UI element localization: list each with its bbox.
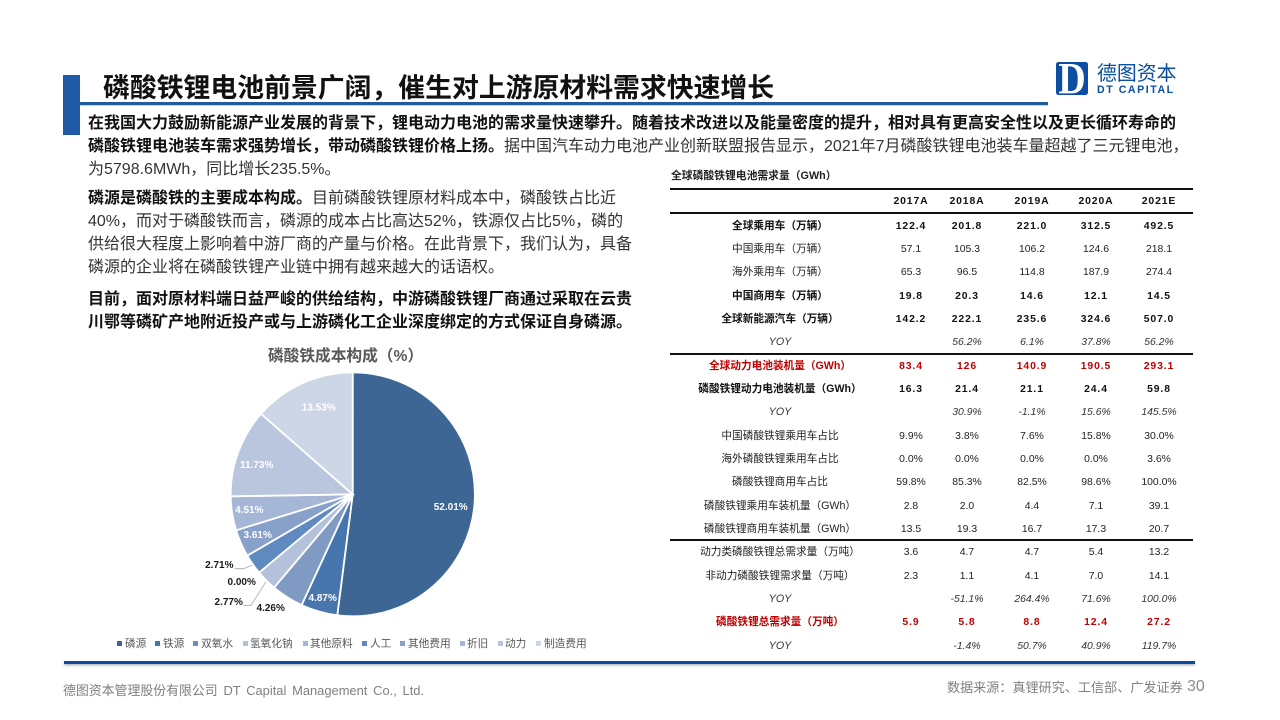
- row: global passenger cars: [732, 220, 1174, 232]
- text block: supply structure: 川鄂等磷矿产地附近投产或与上游磷化工企业深度绑定的方式保证自身磷源。: [88, 314, 632, 331]
- row: power LFP demand: 动力类磷酸铁锂总需求量（万吨）: [700, 546, 860, 558]
- row: global passenger cars: 221.0: [1017, 221, 1047, 232]
- row: global passenger cars: 312.5: [1081, 221, 1111, 232]
- row: total LFP demand: 27.2: [1147, 617, 1171, 628]
- row: global power battery installs: [709, 360, 1174, 372]
- table header: 2020A: [1078, 196, 1114, 207]
- row: China LFP passenger share: 30.0%: [1144, 431, 1174, 442]
- legend swatch 3: [193, 641, 198, 646]
- legend swatch 4: [242, 641, 248, 646]
- row: LFP install growth: -1.1%: [1018, 407, 1046, 418]
- row: global passenger cars: 201.8: [952, 221, 982, 232]
- pie chart: 11.73%: [240, 460, 273, 471]
- row: global passenger cars: 全球乘用车（万辆）: [732, 220, 828, 232]
- row: NEV growth: YOY: [769, 336, 791, 348]
- row: total demand growth: YOY: [769, 640, 791, 652]
- text block: supply structure: [88, 290, 632, 331]
- row: LFP power battery installs: 21.4: [955, 384, 979, 395]
- row: LFP commercial installs: 磷酸铁锂商用车装机量（GWh）: [704, 523, 856, 535]
- legend label 5: 其他原料: [310, 638, 353, 650]
- row: overseas passenger cars: 65.3: [901, 267, 921, 278]
- legend swatch 6: [362, 641, 367, 646]
- table header: [893, 196, 1176, 207]
- title underline: [79, 102, 1048, 105]
- row: non-power LFP demand: 14.1: [1149, 571, 1169, 582]
- row: LFP commercial share: 100.0%: [1141, 477, 1177, 488]
- row: LFP passenger installs: [704, 500, 1169, 512]
- row: China LFP passenger share: [721, 430, 1174, 442]
- legend swatch 8: [460, 641, 464, 646]
- row: global NEVs: 142.2: [896, 314, 926, 325]
- row: LFP power battery installs: 24.4: [1084, 384, 1108, 395]
- page number: 30: [1187, 678, 1205, 695]
- row: power LFP demand: 3.6: [904, 547, 918, 558]
- chart title: 磷酸铁成本构成（%）: [268, 348, 423, 364]
- row: global power battery installs: 83.4: [899, 361, 923, 372]
- row: non-power LFP demand: 非动力磷酸铁锂需求量（万吨）: [705, 570, 855, 582]
- row: power LFP demand: 13.2: [1149, 547, 1169, 558]
- row: LFP commercial share: 59.8%: [896, 477, 926, 488]
- row: overseas passenger cars: [732, 266, 1172, 278]
- legend swatch 2: [155, 641, 160, 646]
- row: China commercial vehicles: 12.1: [1084, 291, 1108, 302]
- row: NEV growth: [769, 336, 1174, 348]
- row: China LFP passenger share: 7.6%: [1020, 431, 1044, 442]
- row: LFP commercial share: 82.5%: [1017, 477, 1047, 488]
- row: global power battery installs: 140.9: [1017, 361, 1047, 372]
- table header: 2018A: [949, 196, 985, 207]
- row: overseas LFP passenger share: 0.0%: [1084, 454, 1108, 465]
- row: overseas LFP passenger share: 0.0%: [899, 454, 923, 465]
- table header: 2021E: [1142, 196, 1176, 207]
- table title: 全球磷酸铁锂电池需求量（GWh）: [671, 170, 837, 182]
- footer rule: [64, 661, 1195, 664]
- row: China passenger cars: 57.1: [901, 244, 921, 255]
- row: LFP commercial share: 85.3%: [952, 477, 982, 488]
- row: global power battery installs: 190.5: [1081, 361, 1111, 372]
- table header: 2019A: [1014, 196, 1050, 207]
- text block: phosphorus cost: [88, 189, 632, 276]
- pie chart: 0.00%: [228, 577, 256, 588]
- pie chart: 2.77%: [215, 597, 243, 608]
- row: total LFP demand: [716, 616, 1171, 628]
- table: demand forecast: [670, 188, 1193, 652]
- row: China passenger cars: 124.6: [1083, 244, 1109, 255]
- row: overseas passenger cars: 187.9: [1083, 267, 1109, 278]
- pie chart: 4.51%: [235, 505, 264, 516]
- row: China LFP passenger share: 9.9%: [899, 431, 923, 442]
- row: China commercial vehicles: 中国商用车（万辆）: [732, 290, 828, 302]
- text block: intro: 在我国大力鼓励新能源产业发展的背景下，锂电动力电池的需求量快速攀升。随着技术改进以及能量密度的提升，相对具有更高安全性以及更长循环寿命的: [88, 114, 1176, 132]
- pie chart: 52.01%: [434, 502, 468, 513]
- text block: intro: 为5798.6MWh，同比增长235.5%。: [88, 161, 341, 178]
- row: total demand growth: 119.7%: [1142, 641, 1176, 652]
- text block: intro: [88, 114, 1189, 178]
- row: LFP passenger installs: 磷酸铁锂乘用车装机量（GWh）: [704, 500, 856, 512]
- row: LFP power battery installs: 16.3: [899, 384, 923, 395]
- row: global NEVs: [721, 312, 1174, 325]
- row: NEV growth: 56.2%: [1144, 337, 1174, 348]
- row: non-power growth: 264.4%: [1014, 594, 1050, 605]
- row: non-power growth: 100.0%: [1141, 594, 1177, 605]
- table rows: [698, 196, 1177, 652]
- legend label 2: 铁源: [163, 638, 184, 650]
- pie chart: 3.61%: [244, 530, 272, 541]
- pie chart: [205, 373, 474, 616]
- legend swatch 9: [498, 641, 502, 646]
- row: China passenger cars: 218.1: [1146, 244, 1172, 255]
- row: LFP commercial installs: 19.3: [957, 524, 977, 535]
- row: total LFP demand: 5.8: [958, 617, 976, 628]
- row: overseas passenger cars: 海外乘用车（万辆）: [732, 266, 828, 278]
- row: overseas LFP passenger share: 海外磷酸铁锂乘用车占比: [721, 453, 839, 465]
- row: China passenger cars: 中国乘用车（万辆）: [732, 243, 828, 255]
- text block: phosphorus cost: 供给很大程度上影响着中游厂商的产量与价格。在此背景下，我们认为，具备: [88, 236, 632, 253]
- row: China passenger cars: 105.3: [954, 244, 980, 255]
- row: non-power LFP demand: [705, 570, 1169, 582]
- row: total LFP demand: 5.9: [902, 617, 920, 628]
- row: LFP passenger installs: 4.4: [1025, 501, 1039, 512]
- row: global passenger cars: 492.5: [1144, 221, 1174, 232]
- legend swatch 5: [302, 641, 308, 646]
- row: non-power LFP demand: 2.3: [904, 571, 918, 582]
- logo english name: DT CAPITAL: [1097, 84, 1175, 96]
- row: power LFP demand: 4.7: [1025, 547, 1039, 558]
- row: LFP commercial installs: 13.5: [901, 524, 921, 535]
- text block: phosphorus cost: 磷源的企业将在磷酸铁锂产业链中拥有越来越大的话语权。: [88, 259, 504, 276]
- row: global NEVs: 507.0: [1144, 314, 1174, 325]
- legend label 9: 动力: [505, 638, 526, 650]
- row: total LFP demand: 磷酸铁锂总需求量（万吨）: [716, 616, 844, 628]
- row: LFP power battery installs: 21.1: [1020, 384, 1044, 395]
- legend swatch 1: [117, 641, 122, 646]
- row: total demand growth: -1.4%: [953, 641, 981, 652]
- row: LFP commercial installs: [704, 522, 1169, 535]
- legend label 8: 折旧: [467, 638, 488, 650]
- row: overseas LFP passenger share: 0.0%: [955, 454, 979, 465]
- legend label 7: 其他费用: [408, 638, 451, 650]
- row: non-power LFP demand: 4.1: [1025, 571, 1039, 582]
- row: total demand growth: [769, 640, 1176, 652]
- row: LFP passenger installs: 2.0: [960, 501, 974, 512]
- row: power LFP demand: 5.4: [1089, 547, 1103, 558]
- row: LFP install growth: [769, 406, 1177, 418]
- row: global power battery installs: 126: [957, 361, 977, 372]
- row: global NEVs: 222.1: [952, 314, 982, 325]
- row: power LFP demand: 4.7: [960, 547, 974, 558]
- legend label 6: 人工: [370, 638, 391, 650]
- row: NEV growth: 56.2%: [952, 337, 982, 348]
- row: global power battery installs: 293.1: [1144, 361, 1174, 372]
- text block: phosphorus cost: 40%，而对于磷酸铁而言，磷源的成本占比高达52%，铁源仅占比5%，磷的: [88, 213, 623, 230]
- row: overseas LFP passenger share: 0.0%: [1020, 454, 1044, 465]
- row: NEV growth: 37.8%: [1081, 337, 1111, 348]
- table header: 2017A: [893, 196, 929, 207]
- row: non-power growth: YOY: [769, 593, 791, 605]
- data source: 数据来源：真锂研究、工信部、广发证券: [947, 680, 1183, 695]
- row: China LFP passenger share: 15.8%: [1081, 431, 1111, 442]
- pie chart: 13.53%: [302, 402, 336, 414]
- row: China LFP passenger share: 3.8%: [955, 431, 979, 442]
- row: non-power growth: 71.6%: [1081, 594, 1111, 605]
- legend label 3: 双氧水: [201, 638, 233, 650]
- row: LFP passenger installs: 7.1: [1089, 501, 1103, 512]
- row: total LFP demand: 8.8: [1023, 617, 1041, 628]
- row: total demand growth: 50.7%: [1017, 641, 1047, 652]
- row: overseas LFP passenger share: 3.6%: [1147, 454, 1171, 465]
- row: overseas LFP passenger share: [721, 452, 1171, 465]
- row: China commercial vehicles: 20.3: [955, 291, 979, 302]
- row: LFP power battery installs: 59.8: [1147, 384, 1171, 395]
- row: LFP install growth: 30.9%: [952, 407, 982, 418]
- row: overseas passenger cars: 274.4: [1146, 267, 1172, 278]
- row: LFP commercial installs: 16.7: [1022, 524, 1042, 535]
- pie chart: 4.87%: [309, 593, 337, 604]
- row: China passenger cars: [732, 242, 1172, 255]
- row: total demand growth: 40.9%: [1081, 641, 1111, 652]
- row: China commercial vehicles: 19.8: [899, 291, 923, 302]
- row: China commercial vehicles: 14.5: [1147, 291, 1171, 302]
- legend label 1: 磷源: [125, 638, 146, 650]
- legend swatch 10: [536, 641, 541, 646]
- row: LFP install growth: 145.5%: [1141, 407, 1177, 418]
- logo: DT Capital: [1056, 62, 1177, 96]
- row: LFP passenger installs: 2.8: [904, 501, 918, 512]
- logo chinese name: 德图资本: [1097, 62, 1177, 84]
- row: non-power LFP demand: 1.1: [960, 571, 974, 582]
- row: NEV growth: 6.1%: [1020, 337, 1044, 348]
- row: LFP commercial share: 磷酸铁锂商用车占比: [732, 476, 828, 488]
- row: LFP commercial share: 98.6%: [1081, 477, 1111, 488]
- row: LFP power battery installs: [698, 382, 1171, 395]
- pie chart: 4.26%: [257, 603, 285, 614]
- row: China passenger cars: 106.2: [1019, 244, 1045, 255]
- row: overseas passenger cars: 96.5: [957, 267, 977, 278]
- text block: phosphorus cost: 磷源是磷酸铁的主要成本构成。目前磷酸铁锂原材料成本中，磷酸铁占比近: [88, 190, 616, 206]
- row: total LFP demand: 12.4: [1084, 617, 1108, 628]
- row: China commercial vehicles: [732, 290, 1171, 302]
- row: global NEVs: 235.6: [1017, 314, 1047, 325]
- row: LFP commercial installs: 20.7: [1149, 524, 1169, 535]
- text block: intro: 磷酸铁锂电池装车需求强势增长，带动磷酸铁锂价格上扬。据中国汽车动力电池产业创新联盟报告显示，2021年7月磷酸铁锂电池装车量超越了三元锂电池，: [88, 138, 1189, 155]
- row: non-power growth: -51.1%: [951, 594, 983, 605]
- row: global power battery installs: 全球动力电池装机量（GWh）: [709, 360, 851, 372]
- row: global passenger cars: 122.4: [896, 221, 926, 232]
- title: 磷酸铁锂电池前景广阔，催生对上游原材料需求快速增长: [103, 73, 774, 103]
- footer company name: 德图资本管理股份有限公司 DT Capital Management Co., Ltd.: [63, 683, 424, 698]
- row: LFP power battery installs: 磷酸铁锂动力电池装机量（GWh）: [698, 383, 862, 395]
- row: LFP install growth: YOY: [769, 406, 791, 418]
- row: China commercial vehicles: 14.6: [1020, 291, 1044, 302]
- pie chart: 2.71%: [205, 560, 234, 571]
- row: LFP passenger installs: 39.1: [1149, 501, 1169, 512]
- row: global NEVs: 324.6: [1081, 314, 1111, 325]
- legend swatch 7: [400, 641, 405, 646]
- row: China LFP passenger share: 中国磷酸铁锂乘用车占比: [721, 430, 839, 442]
- row: LFP commercial installs: 17.3: [1086, 524, 1106, 535]
- row: LFP commercial share: [732, 476, 1177, 488]
- row: non-power growth: [769, 593, 1177, 605]
- row: overseas passenger cars: 114.8: [1019, 267, 1045, 278]
- text block: supply structure: 目前，面对原材料端日益严峻的供给结构，中游磷酸铁锂厂商通过采取在云贵: [88, 290, 632, 308]
- legend label 4: 氢氧化钠: [250, 638, 293, 650]
- row: non-power LFP demand: 7.0: [1089, 571, 1103, 582]
- legend label 10: 制造费用: [544, 638, 587, 650]
- row: global NEVs: 全球新能源汽车（万辆）: [721, 313, 839, 325]
- row: LFP install growth: 15.6%: [1081, 407, 1111, 418]
- row: power LFP demand: [700, 546, 1169, 558]
- header accent bar: [63, 75, 80, 135]
